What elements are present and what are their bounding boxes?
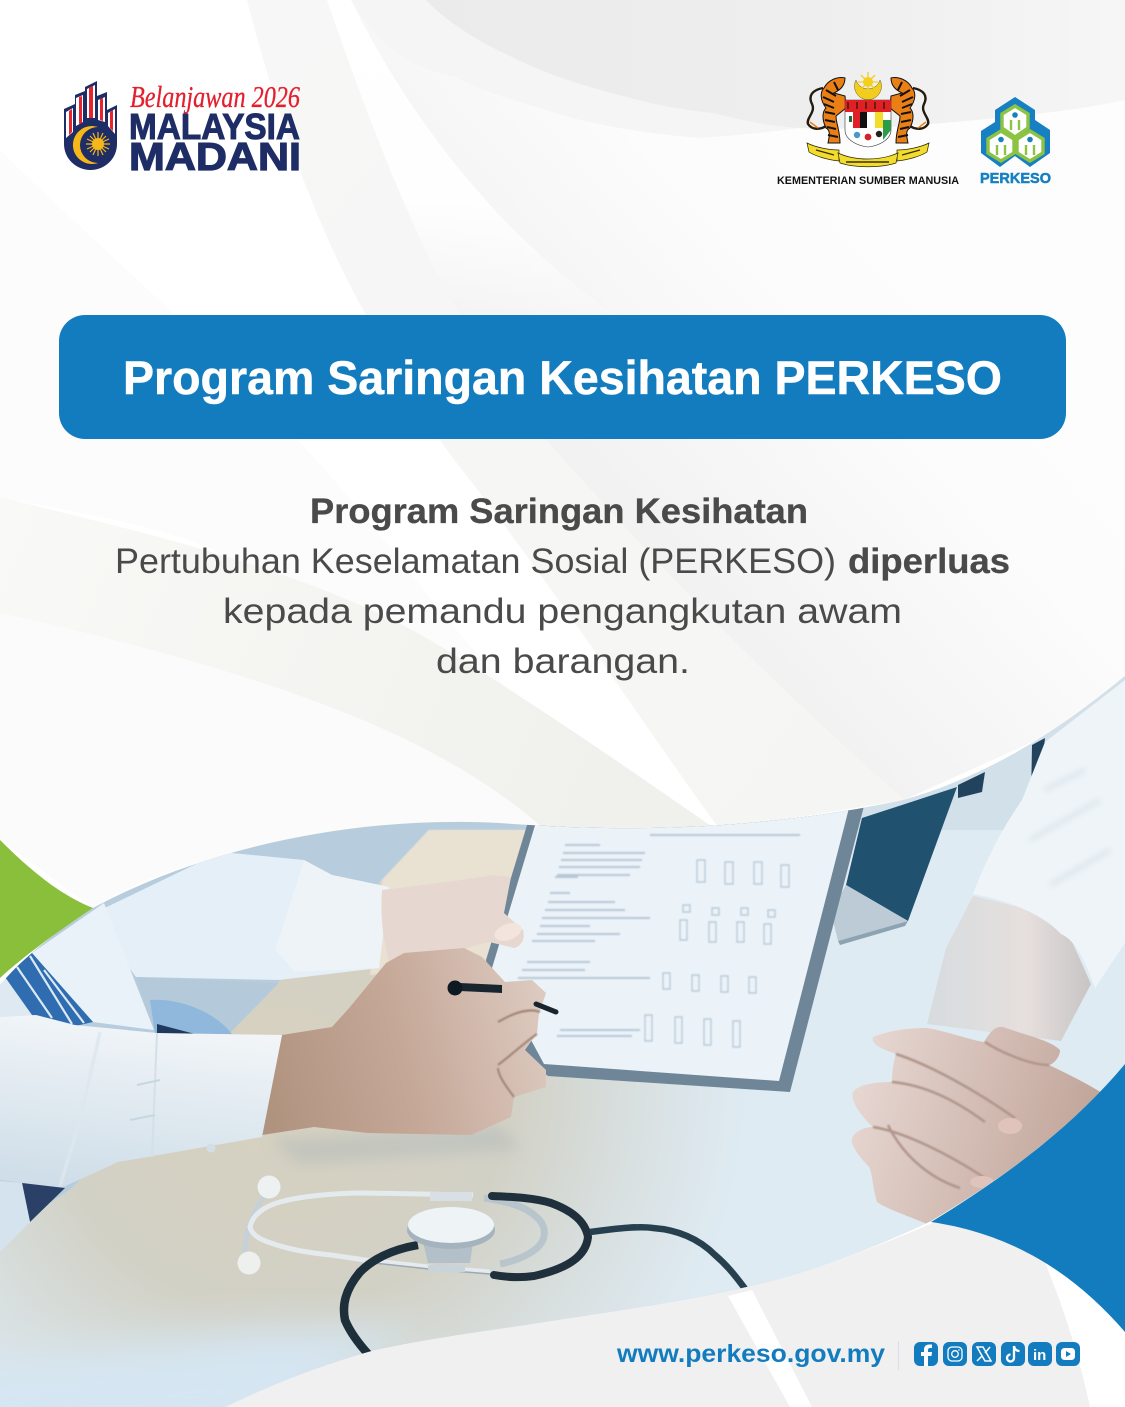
doctor lapel (32, 903, 154, 1030)
desk lower blue tone (0, 1330, 420, 1407)
pen (448, 980, 556, 1012)
bottom grey swoosh (225, 1222, 1090, 1407)
doctor back sleeve (90, 852, 389, 980)
doctor back cuff (275, 860, 389, 972)
logo: PERKESO (980, 97, 1051, 187)
patient sleeve and arm (927, 680, 1125, 1041)
logo: Jata Negara coat of arms (777, 72, 959, 187)
icon: hand with stripes and crescent (64, 81, 117, 170)
icon: facebook (914, 1342, 938, 1366)
form lines on paper (518, 835, 800, 1036)
doctor striped tie (5, 953, 93, 1027)
text: MALAYSIA: MALAYSIA (129, 106, 300, 147)
stethoscope chest piece (407, 1207, 495, 1272)
laptop (831, 787, 957, 945)
line 2 bold: diperluas (848, 542, 1010, 581)
text: MADANI: MADANI (129, 136, 301, 179)
line 1: Program Saringan Kesihatan (310, 492, 808, 531)
dark trousers under arm (22, 1183, 65, 1222)
icon: PERKESO hexagons (981, 97, 1050, 167)
icon: linkedin (1028, 1342, 1052, 1366)
doctor chair and dark area (150, 983, 279, 1034)
icon: shield (845, 100, 891, 147)
icon: instagram (943, 1342, 967, 1366)
text: PERKESO: PERKESO (980, 171, 1051, 187)
icon: X (972, 1342, 996, 1366)
body text (115, 492, 1010, 681)
checkbox columns (645, 860, 789, 1047)
icon: motto scroll (807, 143, 929, 167)
desk surface (0, 830, 1125, 1407)
line 3: kepada pemandu pengangkutan awam (223, 592, 902, 631)
desk warm wood tone (0, 830, 700, 1369)
icon: crescent and star (854, 72, 882, 100)
stethoscope (238, 1176, 746, 1355)
table shadow below front hand (270, 1125, 520, 1165)
patient clasped hands (852, 1026, 1100, 1224)
line 2 regular: Pertubuhan Keselamatan Sosial (PERKESO) (115, 542, 836, 581)
doctor front sleeve (0, 1015, 282, 1188)
icon: right tiger (890, 77, 928, 143)
desk far edge highlight (370, 830, 530, 975)
icon: linkedin: in (1033, 1347, 1046, 1364)
dark window frame (958, 738, 1045, 800)
white coat lower (0, 1181, 30, 1252)
doctor shirt collar area (0, 979, 32, 1017)
blue corner shape (931, 1064, 1125, 1332)
text: Belanjawan 2026: Belanjawan 2026 (130, 79, 300, 114)
line 4: dan barangan. (436, 642, 690, 681)
clipboard (486, 806, 864, 1092)
photo: doctor and patient at desk (0, 660, 1125, 1407)
title banner (59, 315, 1066, 439)
photo backdrop wall (0, 670, 1125, 1407)
footer website and social icons (616, 1340, 1080, 1370)
icon: left tiger (808, 77, 846, 143)
icon: youtube (1056, 1342, 1080, 1366)
title text: Program Saringan Kesihatan PERKESO (123, 351, 1002, 404)
right background wall (858, 676, 1125, 830)
icon: tiktok (1001, 1342, 1025, 1366)
website url: www.perkeso.gov.my (616, 1340, 885, 1368)
doctor front hand (262, 948, 546, 1135)
doctor back hand holding clipboard (381, 875, 524, 962)
text: Kementerian Sumber Manusia: KEMENTERIAN SUMBER MANUSIA (777, 175, 959, 187)
green corner shape (0, 840, 93, 978)
logo: Belanjawan 2026 Malaysia Madani (64, 79, 301, 179)
